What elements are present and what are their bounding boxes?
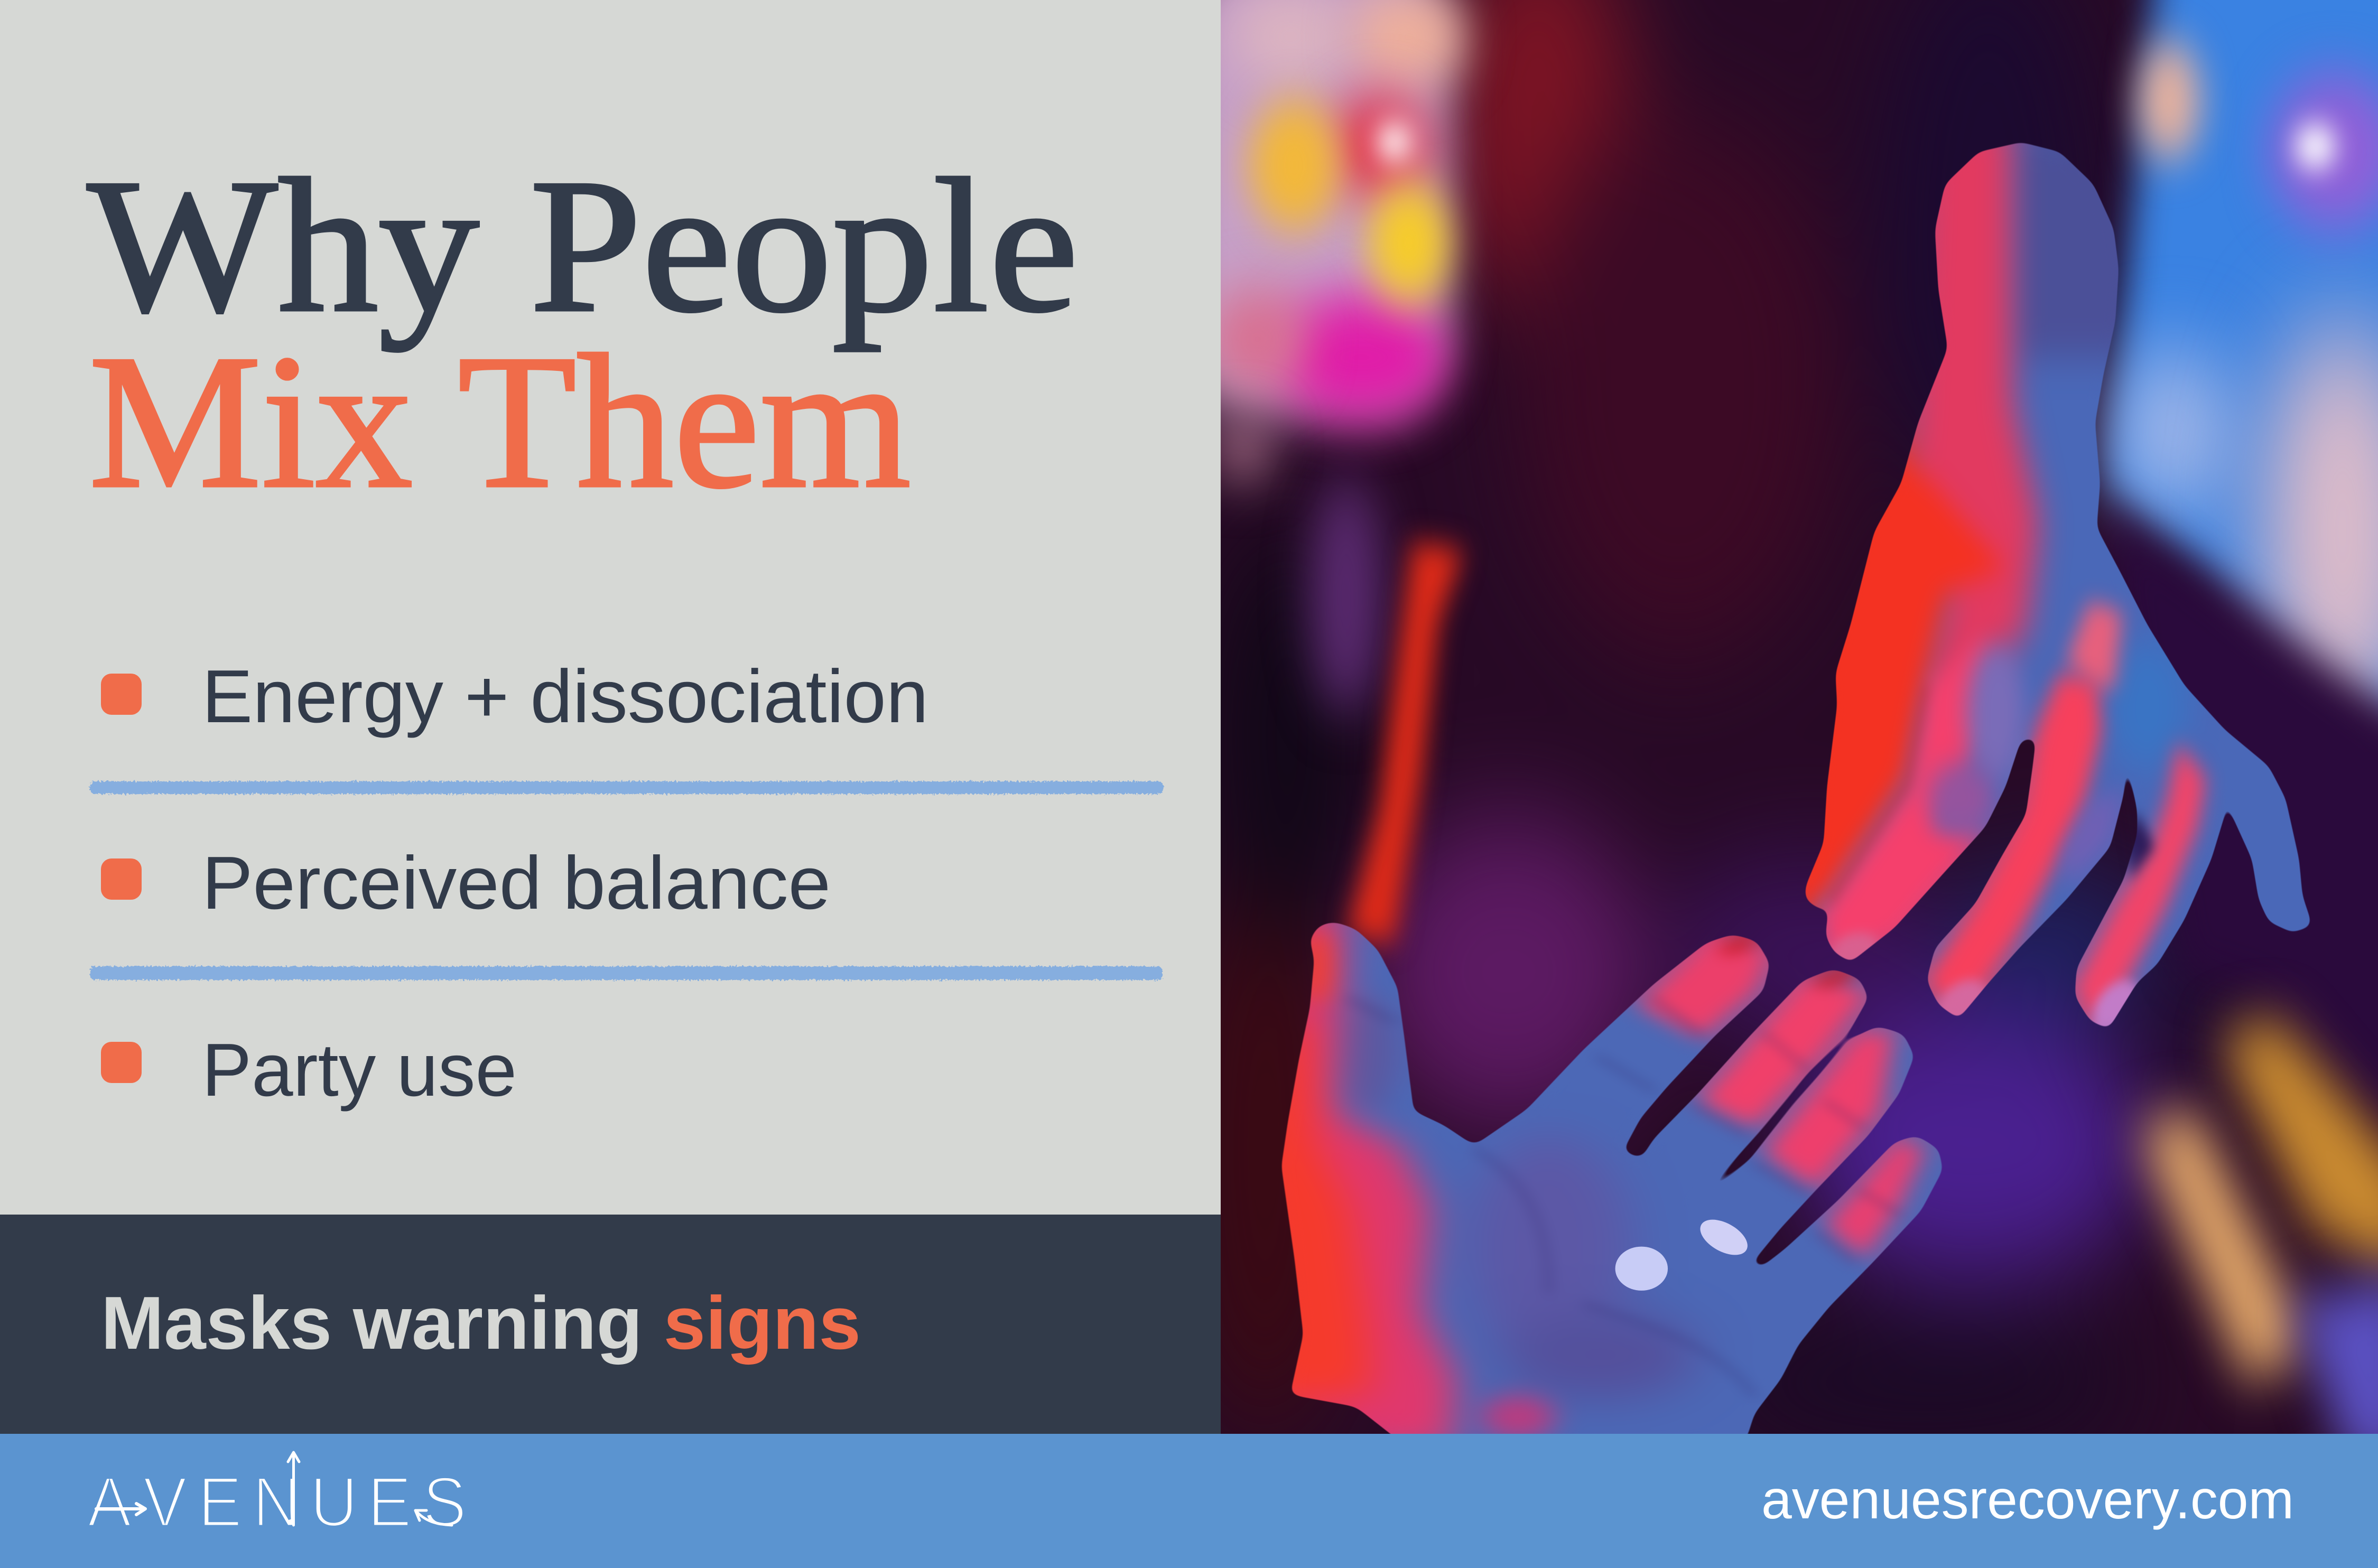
blurred red strip, centre left [1346, 540, 1464, 944]
finger creases and palm lines [1347, 998, 1899, 1396]
bullet 1 [101, 674, 142, 715]
photo: two hands exchanging pills under neon light [1176, 0, 2378, 1467]
reason: energy and dissociation: Energy + dissociation [202, 655, 928, 739]
reason: party use: Party use [202, 1028, 517, 1112]
bullet 3 [101, 1042, 142, 1083]
reason: perceived balance: Perceived balance [202, 841, 831, 925]
panel: footer band [0, 1434, 2378, 1568]
warning text: Masks warning signs [101, 1281, 861, 1365]
bullet 2 [101, 858, 142, 900]
blurred amber lights, bottom right [2136, 1018, 2378, 1467]
upper hand [1783, 116, 2329, 1045]
blurred dark sleeve, right [2103, 504, 2378, 1173]
pill 2 [1692, 1213, 1756, 1262]
title [87, 139, 1079, 528]
photo background: blurred club scene [1176, 0, 2378, 1467]
panel: left background [0, 0, 1221, 1215]
title line: Mix Them: Mix Them [89, 315, 911, 528]
logo arrows [96, 1452, 452, 1525]
panel: dark warning band [0, 1215, 1221, 1434]
title line: Why People: Why People [87, 139, 1079, 352]
logo: Avenues: AVENUES [88, 1463, 467, 1542]
website URL: avenuesrecovery.com [1761, 1469, 2294, 1530]
list: reasons [90, 655, 1164, 1112]
blurred blue window, top right [2106, 0, 2378, 751]
pill 1 [1615, 1247, 1668, 1291]
lower hand [1251, 909, 1961, 1451]
fingernails, upper hand [1832, 929, 2144, 1036]
blurred bokeh lights, top left [1176, 0, 1468, 715]
